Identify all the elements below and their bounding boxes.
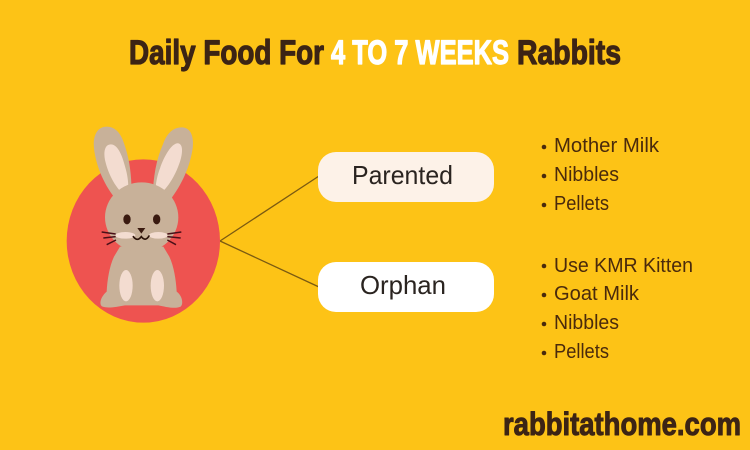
- list: orphan foods: Nibbles: [554, 312, 619, 334]
- head: [105, 182, 178, 252]
- list: orphan foods: [542, 255, 693, 363]
- left ear: [94, 127, 132, 200]
- pill: orphan: Orphan: [360, 270, 446, 300]
- title: age range highlight: 4 TO 7 WEEKS: [331, 34, 509, 72]
- whiskers: [102, 232, 181, 245]
- title: rabbits: Rabbits: [517, 34, 621, 72]
- pill: parented: [318, 152, 494, 202]
- cheeks: [115, 232, 168, 239]
- right ear: [153, 127, 193, 200]
- list: parented foods: [542, 135, 660, 215]
- list: orphan foods: Use KMR Kitten: [554, 255, 693, 277]
- list: orphan foods: Goat Milk: [554, 283, 640, 305]
- pill: parented: Parented: [352, 160, 453, 190]
- connector lines: [220, 176, 319, 287]
- title: [129, 34, 621, 72]
- title: daily food for: Daily Food For: [129, 34, 324, 72]
- list: parented foods: Nibbles: [554, 164, 619, 186]
- icon: rabbit in red circle: [67, 127, 220, 323]
- pill: orphan: [318, 262, 494, 312]
- right inner ear: [156, 143, 182, 196]
- list: parented foods: Pellets: [554, 193, 609, 215]
- list: orphan foods: Pellets: [554, 341, 609, 363]
- list: parented foods: Mother Milk: [554, 135, 660, 157]
- nose and mouth: [133, 228, 149, 239]
- eyes: [123, 214, 160, 224]
- leg markings: [119, 270, 164, 301]
- left inner ear: [104, 144, 128, 196]
- rabbit body: [100, 247, 182, 308]
- red circle: [67, 159, 220, 323]
